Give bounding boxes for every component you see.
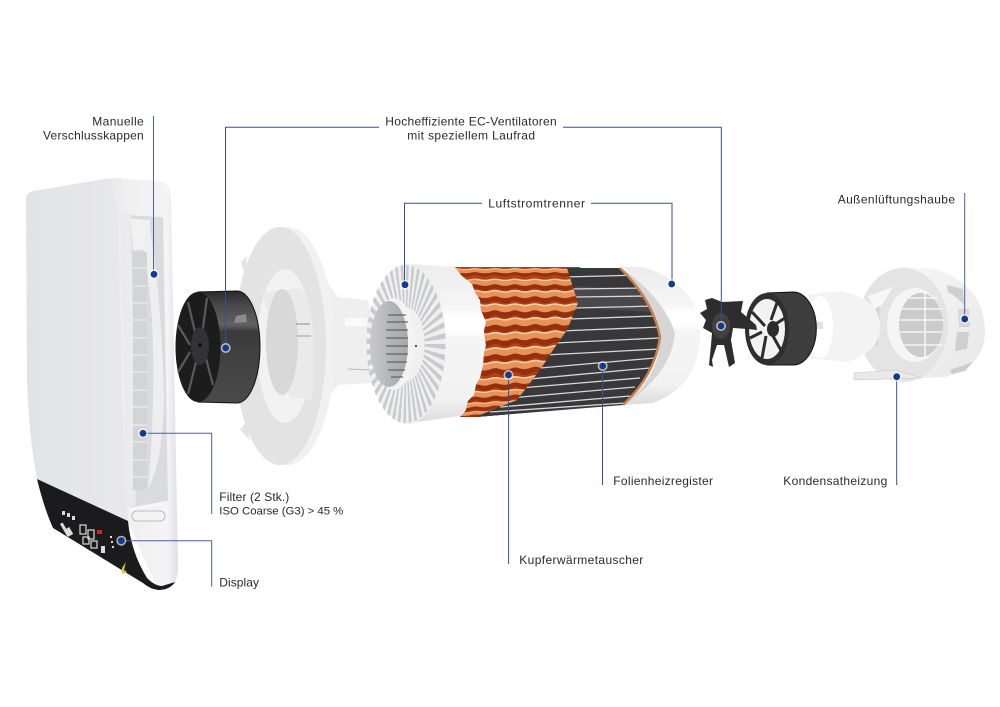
front rim <box>745 293 789 365</box>
icon: EC fan, front <box>176 291 260 403</box>
grille <box>899 293 943 357</box>
inner tube <box>262 288 314 400</box>
display readouts <box>60 511 127 574</box>
callout: Außenlüftungshaube <box>838 192 970 324</box>
sleeve body <box>807 291 880 362</box>
fan hub <box>191 327 209 365</box>
center vent <box>958 309 970 327</box>
grille bars <box>899 293 943 357</box>
callout: Kupferwärmetauscher <box>504 370 643 567</box>
fan housing <box>198 291 260 403</box>
vanes <box>750 300 785 358</box>
icon: rear fan <box>745 292 816 365</box>
sleeve opening <box>807 296 833 358</box>
callout: Hocheffiziente EC-Ventilatoren <box>221 115 726 353</box>
air separator face <box>368 264 446 424</box>
housing <box>767 292 816 365</box>
fan front face <box>176 292 220 402</box>
right collar <box>623 267 700 405</box>
ring tabs <box>240 256 250 440</box>
icon: white sleeve <box>807 291 880 362</box>
icon: impeller <box>700 298 757 367</box>
label: Hocheffiziente EC-Ventilatoren <box>385 115 557 129</box>
callout: Hocheffiziente EC-Ventilatoren: mit speziellem Laufrad <box>407 128 535 142</box>
label: Kondensatheizung <box>783 474 887 488</box>
upper vent <box>947 285 964 305</box>
label: Manuelle <box>92 115 144 129</box>
copper heat exchanger <box>455 267 580 417</box>
hole slats <box>386 315 408 377</box>
cap handle <box>132 511 165 521</box>
curved filter sheet <box>144 222 164 492</box>
filter slot <box>121 215 168 508</box>
device left face <box>26 178 140 522</box>
foil heater <box>475 268 659 417</box>
opening <box>749 299 785 359</box>
device side face <box>110 178 178 588</box>
label: Filter (2 Stk.) <box>219 490 289 504</box>
left collar <box>410 264 487 423</box>
display panel <box>37 479 175 590</box>
callout: Luftstromtrenner <box>400 197 677 290</box>
callout: Filter: ISO Coarse (G3) > 45 % <box>219 505 343 517</box>
mesh <box>868 287 893 310</box>
label: Außenlüftungshaube <box>838 192 955 206</box>
front opening <box>858 268 948 382</box>
hole rim <box>373 298 415 390</box>
label: Kupferwärmetauscher <box>519 553 643 567</box>
inner tube mouth <box>266 289 298 395</box>
air separator fins <box>377 286 435 402</box>
lower vent <box>955 332 969 351</box>
grille ring <box>887 288 943 362</box>
hub <box>712 313 730 339</box>
hole <box>370 301 408 387</box>
neck <box>305 262 373 425</box>
blades <box>700 298 757 367</box>
callout: Manuelle Verschlusskappen: Verschlusskappen <box>43 128 144 142</box>
slot rim bottom <box>127 501 168 512</box>
bottom vent <box>950 362 973 374</box>
icon: wall unit with display and filter <box>26 178 178 590</box>
outer ring face <box>234 227 326 465</box>
ring opening <box>257 269 313 423</box>
condensate bar <box>854 370 922 380</box>
icon: exterior hood <box>854 267 985 382</box>
label: Display <box>219 576 259 590</box>
callout: Kondensatheizung <box>783 372 902 488</box>
hub <box>767 321 779 337</box>
copper end strip <box>620 268 660 405</box>
outer ring rim <box>241 227 335 465</box>
fan blades <box>178 298 213 394</box>
icon: heat exchanger cylinder <box>368 264 700 424</box>
label: Folienheizregister <box>613 474 713 488</box>
callout: Folienheizregister <box>598 361 713 488</box>
callout: Filter <box>138 428 343 517</box>
dome <box>903 267 985 380</box>
callout: Manuelle Verschlusskappen <box>43 115 159 279</box>
right collar ring <box>620 267 675 405</box>
label: Luftstromtrenner <box>488 197 585 211</box>
icon: mounting ring <box>234 227 373 465</box>
filter fins <box>133 252 147 490</box>
fan housing notch <box>234 314 247 323</box>
filter cover <box>131 219 150 250</box>
callout: Display <box>116 536 259 590</box>
